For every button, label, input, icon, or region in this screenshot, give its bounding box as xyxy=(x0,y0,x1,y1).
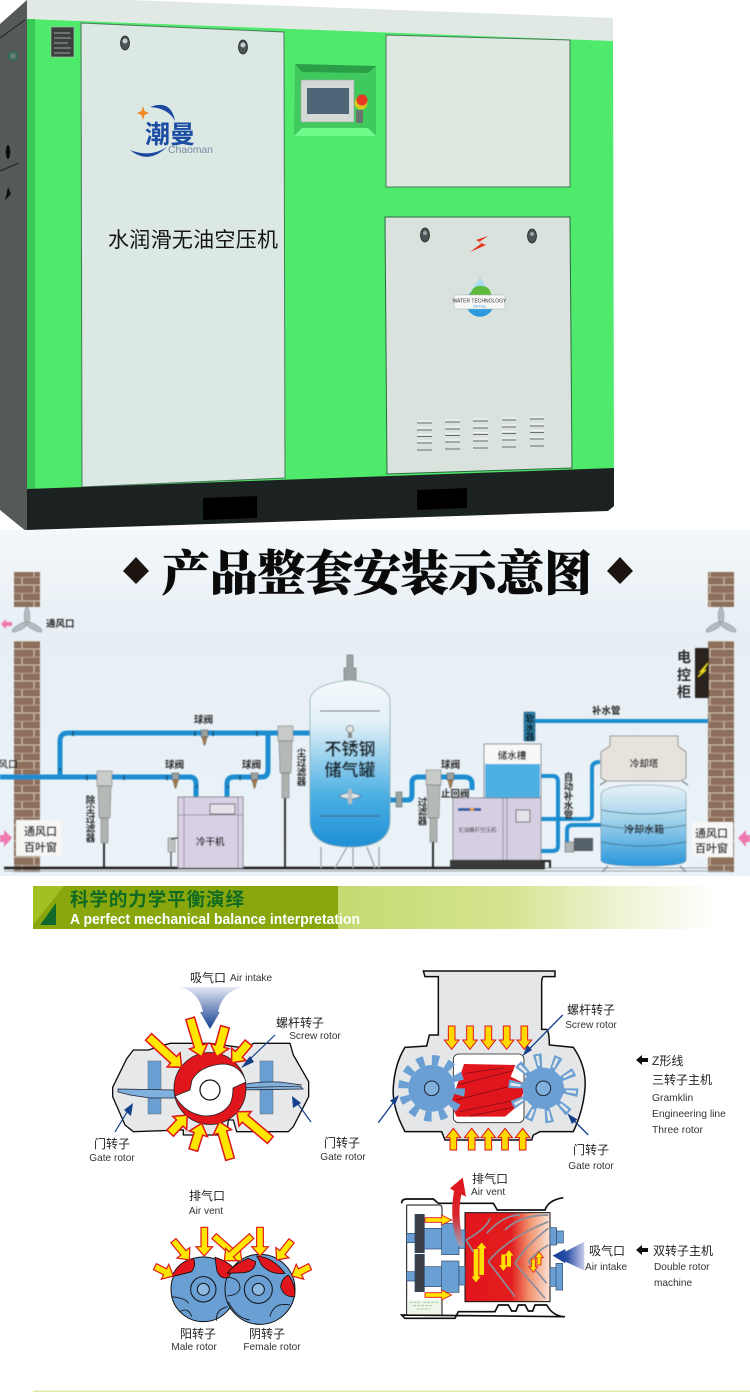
gate rotor label: 门转子 xyxy=(573,1142,609,1157)
valve labels: 球阀 xyxy=(242,759,261,771)
screw rotor label: 螺杆转子 xyxy=(276,1015,324,1030)
right gate rotor label: Gate rotor xyxy=(320,1152,366,1163)
valve labels: 球阀 xyxy=(441,759,460,771)
yellow airflow arrows bottom xyxy=(446,1128,530,1150)
water storage tank: 储水槽 xyxy=(498,750,527,762)
double rotor note: machine xyxy=(654,1278,693,1289)
female rotor label: 阴转子 xyxy=(249,1326,285,1341)
left vent louver box xyxy=(16,820,62,856)
oil free screw compressor: 无油螺杆空压机 xyxy=(458,826,497,834)
lightning mark xyxy=(470,236,488,252)
Z line three rotor note: Three rotor xyxy=(652,1125,704,1136)
Z line three rotor note: Engineering line xyxy=(652,1109,726,1120)
black pointer arrow xyxy=(636,1055,648,1065)
middle filter label: 尘过滤器 xyxy=(294,747,306,787)
left filter xyxy=(97,771,112,868)
screw rotor label: Screw rotor xyxy=(565,1020,617,1031)
right vent louver box: 百叶窗 xyxy=(695,841,728,855)
water technology badge xyxy=(453,278,507,317)
cooling water tank: 冷却水箱 xyxy=(624,823,664,836)
screw rotor xyxy=(174,1052,246,1124)
ground line xyxy=(4,867,545,869)
oil free screw compressor xyxy=(450,798,545,868)
stainless air tank: 不锈钢 xyxy=(324,740,376,759)
compressed air pipes xyxy=(0,733,472,800)
male rotor label: 阳转子 xyxy=(180,1326,216,1341)
machine side panel xyxy=(0,0,27,532)
section header band: 科学的力学平衡演绎 xyxy=(70,889,244,910)
louvers xyxy=(417,417,544,450)
electrical cabinet label: 柜 xyxy=(677,684,691,700)
cooling water pipes xyxy=(535,721,708,851)
water technology badge: Oil-Free xyxy=(473,304,486,308)
valve labels: 球阀 xyxy=(165,759,184,771)
machine top cap xyxy=(27,0,613,41)
double rotor note: Double rotor xyxy=(654,1262,710,1273)
water pipe label: 补水管 xyxy=(592,705,621,717)
valve labels: 止回阀 xyxy=(441,788,470,800)
refrigerated dryer xyxy=(168,797,243,868)
right fan xyxy=(705,607,737,634)
gate rotor label: Gate rotor xyxy=(568,1161,614,1172)
pump xyxy=(541,838,593,868)
air vent label: Air vent xyxy=(471,1187,505,1198)
female rotor label xyxy=(243,1326,301,1353)
black pointer arrow xyxy=(636,1245,648,1255)
rotor cavity xyxy=(453,1054,524,1123)
left fan xyxy=(11,607,43,634)
panel: installation diagram xyxy=(0,530,750,876)
right vent louver box: 通风口 xyxy=(695,826,728,840)
diagram D: double rotor machine xyxy=(402,1171,713,1318)
section header band xyxy=(33,886,720,929)
housing xyxy=(393,971,585,1140)
housing outline xyxy=(402,1198,565,1318)
cooling tower xyxy=(601,736,686,781)
lower right door xyxy=(385,217,572,474)
right gear xyxy=(515,1060,571,1116)
red screw rotor xyxy=(450,1064,527,1117)
water softener: 软水器 xyxy=(524,713,534,742)
valve labels xyxy=(165,714,470,800)
right filter xyxy=(426,770,441,868)
male rotor label xyxy=(171,1326,217,1353)
right filter label: 过滤器 xyxy=(416,796,427,826)
male rotor label: Male rotor xyxy=(171,1342,217,1353)
pink vent arrow lower left xyxy=(0,830,12,847)
screw rotor label xyxy=(565,1002,617,1031)
stainless air tank xyxy=(310,655,390,868)
shafts and gears xyxy=(407,1214,563,1292)
intake label: Air intake xyxy=(230,973,272,984)
left gear xyxy=(403,1060,460,1117)
air vent label: 排气口 xyxy=(189,1188,225,1203)
ball valves xyxy=(172,730,454,788)
air intake label xyxy=(585,1243,627,1273)
tank flange xyxy=(396,792,402,807)
vent arrow xyxy=(450,1178,466,1247)
screw rotor label xyxy=(276,1015,341,1042)
intake label xyxy=(190,970,272,985)
intake label: 吸气口 xyxy=(190,970,226,985)
yellow airflow arrows xyxy=(142,1016,277,1162)
intake funnel arrow xyxy=(180,987,242,1029)
intake arrow xyxy=(553,1242,584,1270)
inner casing xyxy=(407,1205,442,1315)
nameplate xyxy=(51,27,74,57)
left gate rotor label xyxy=(89,1136,135,1164)
Z line three rotor note xyxy=(652,1054,726,1136)
valve labels: 球阀 xyxy=(194,714,213,726)
screw rotor label: Screw rotor xyxy=(289,1031,341,1042)
air vent label xyxy=(471,1171,508,1198)
product name: 水润滑无油空压机 xyxy=(108,229,278,252)
Chaoman logo xyxy=(130,105,213,157)
cooling tower: 冷却塔 xyxy=(630,758,659,770)
pink vent arrow lower right xyxy=(738,830,750,847)
section header band: A perfect mechanical balance interpretation xyxy=(70,912,360,928)
Chaoman logo: 潮曼 xyxy=(145,121,195,149)
air vent label xyxy=(189,1188,225,1217)
left filter label: 除尘过滤器 xyxy=(84,794,95,843)
door bolts xyxy=(120,36,536,243)
right wall xyxy=(708,572,734,872)
panel: air compressor machine photo xyxy=(0,0,614,532)
pipe flanges xyxy=(60,731,257,788)
machine base xyxy=(27,468,614,530)
double rotor note: 双转子主机 xyxy=(653,1243,713,1258)
Chaoman logo: Chaoman xyxy=(168,144,213,156)
electrical cabinet label xyxy=(677,649,691,700)
air vent label: 排气口 xyxy=(472,1171,508,1186)
Z line three rotor note: 三转子主机 xyxy=(652,1072,712,1087)
right gate rotor label: 门转子 xyxy=(324,1135,360,1150)
left vent louver box: 通风口 xyxy=(24,824,57,838)
pink vent arrow top left xyxy=(1,619,12,629)
Z line three rotor note: Gramklin xyxy=(652,1093,693,1104)
yellow airflow arrows xyxy=(151,1227,314,1283)
screw rotor label: 螺杆转子 xyxy=(567,1002,615,1017)
diagram C: twin rotor cross section xyxy=(151,1188,314,1353)
machine green body xyxy=(27,19,614,492)
diamond right xyxy=(607,557,633,584)
rotor block xyxy=(465,1213,550,1302)
stainless air tank: 储气罐 xyxy=(324,761,376,780)
diagram A: single screw compressor xyxy=(89,970,366,1164)
electrical cabinet label: 控 xyxy=(677,667,691,683)
yellow airflow arrows xyxy=(425,1215,543,1300)
diamond left xyxy=(123,557,149,584)
left gate rotor label: Gate rotor xyxy=(89,1153,135,1164)
bottom rule xyxy=(33,1390,750,1392)
water storage tank xyxy=(484,744,541,798)
left vent louver box: 百叶窗 xyxy=(24,840,57,854)
electrical cabinet xyxy=(695,648,709,698)
diagram background xyxy=(0,530,750,876)
blue pointer lines xyxy=(115,1035,311,1132)
air intake label: Air intake xyxy=(585,1262,627,1273)
water technology badge: WATER TECHNOLOGY xyxy=(453,298,507,304)
electrical cabinet label: 电 xyxy=(677,649,691,665)
cooling water tank xyxy=(600,781,688,872)
left gate rotor label: 门转子 xyxy=(94,1136,130,1151)
right vent louver box xyxy=(692,822,733,857)
housing xyxy=(113,1043,309,1135)
blue pointer lines xyxy=(378,1015,588,1135)
yellow airflow arrows top xyxy=(444,1026,532,1049)
coolant xyxy=(407,1300,441,1314)
left wall xyxy=(14,572,40,872)
vent label top: 通风口 xyxy=(46,619,75,630)
refrigerated dryer: 冷干机 xyxy=(196,836,225,848)
left door xyxy=(81,23,285,487)
diagram B: three rotor compressor xyxy=(378,971,726,1172)
female rotor label: Female rotor xyxy=(243,1342,301,1353)
double rotor note xyxy=(653,1243,713,1289)
right gate rotor label xyxy=(320,1135,366,1163)
gate rotors xyxy=(118,1061,303,1114)
auto fill pipe label: 自动补水管 xyxy=(562,771,573,820)
diagram title: 产品整套安装示意图 xyxy=(162,535,592,604)
air vent label: Air vent xyxy=(189,1206,223,1217)
control panel recess xyxy=(294,64,376,136)
upper right door xyxy=(386,35,570,187)
Z line three rotor note: Z形线 xyxy=(652,1054,683,1068)
male and female rotors xyxy=(171,1254,295,1324)
gate rotor label xyxy=(568,1142,614,1172)
middle filter xyxy=(278,726,293,868)
air intake label: 吸气口 xyxy=(589,1243,625,1258)
